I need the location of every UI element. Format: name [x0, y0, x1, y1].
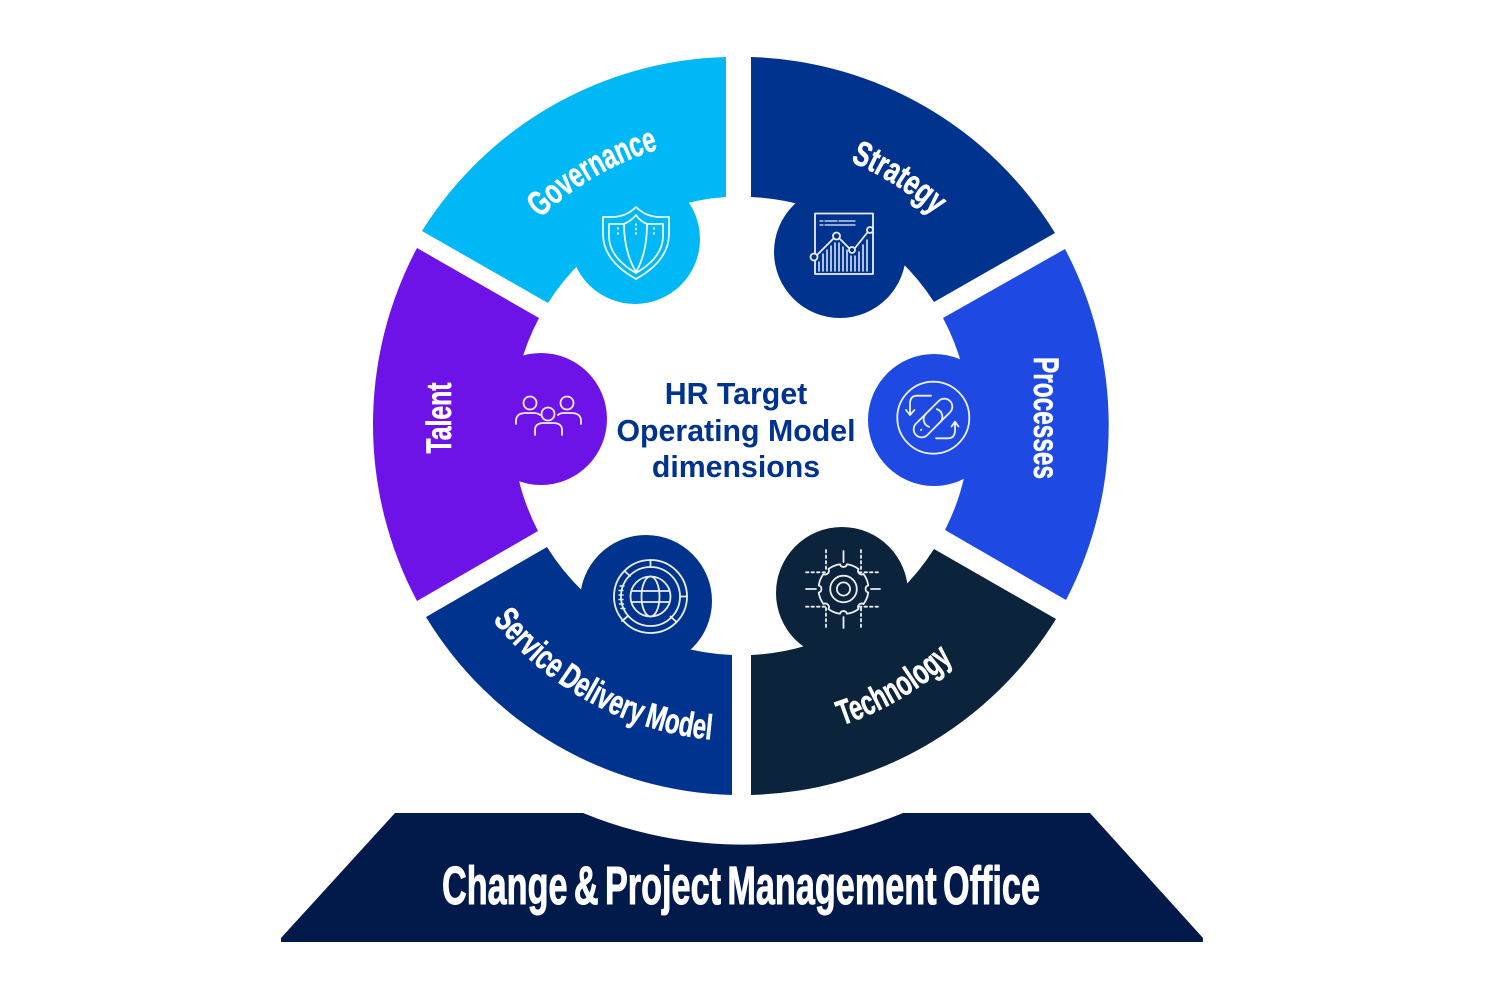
base shape [281, 813, 1203, 942]
icon: gear with circuit lines [806, 550, 880, 628]
label: technology: Technology [834, 646, 952, 724]
icon: shield [603, 207, 669, 279]
base: Change and Project Management Office [281, 813, 1203, 942]
panel: strategy [751, 57, 1055, 318]
center text: HR Target Operating Model dimensions [616, 378, 856, 484]
label: service delivery model: Service Delivery Model [495, 608, 712, 740]
label: talent: Talent [425, 382, 452, 454]
base label: Change & Project Management Office [442, 856, 1040, 916]
segment shape: talent [373, 248, 607, 601]
panel: talent [373, 248, 607, 601]
segment shape: governance [422, 57, 726, 304]
label: strategy: Strategy [852, 142, 947, 215]
segment shape: processes [868, 249, 1109, 600]
segment shape: technology [751, 527, 1056, 795]
icon: line and bar chart [810, 214, 873, 274]
panel: processes [868, 249, 1109, 600]
panel: technology [751, 527, 1056, 795]
panel: governance [422, 57, 726, 304]
center text: HR Target Operating Model dimensions: dimensions [652, 451, 820, 484]
center text: HR Target Operating Model dimensions: HR Target [665, 378, 807, 411]
label: governance: Governance [528, 132, 656, 214]
label: processes: Processes [1033, 358, 1059, 478]
panel: service delivery model [426, 535, 732, 795]
center text: HR Target Operating Model dimensions: Operating Model [616, 415, 856, 448]
icon: linked chain with arrows [897, 382, 969, 454]
segment shape: strategy [751, 57, 1055, 318]
icon: globe in rings [614, 560, 687, 633]
icon: three people [516, 396, 581, 435]
segment shape: service delivery model [426, 535, 732, 795]
